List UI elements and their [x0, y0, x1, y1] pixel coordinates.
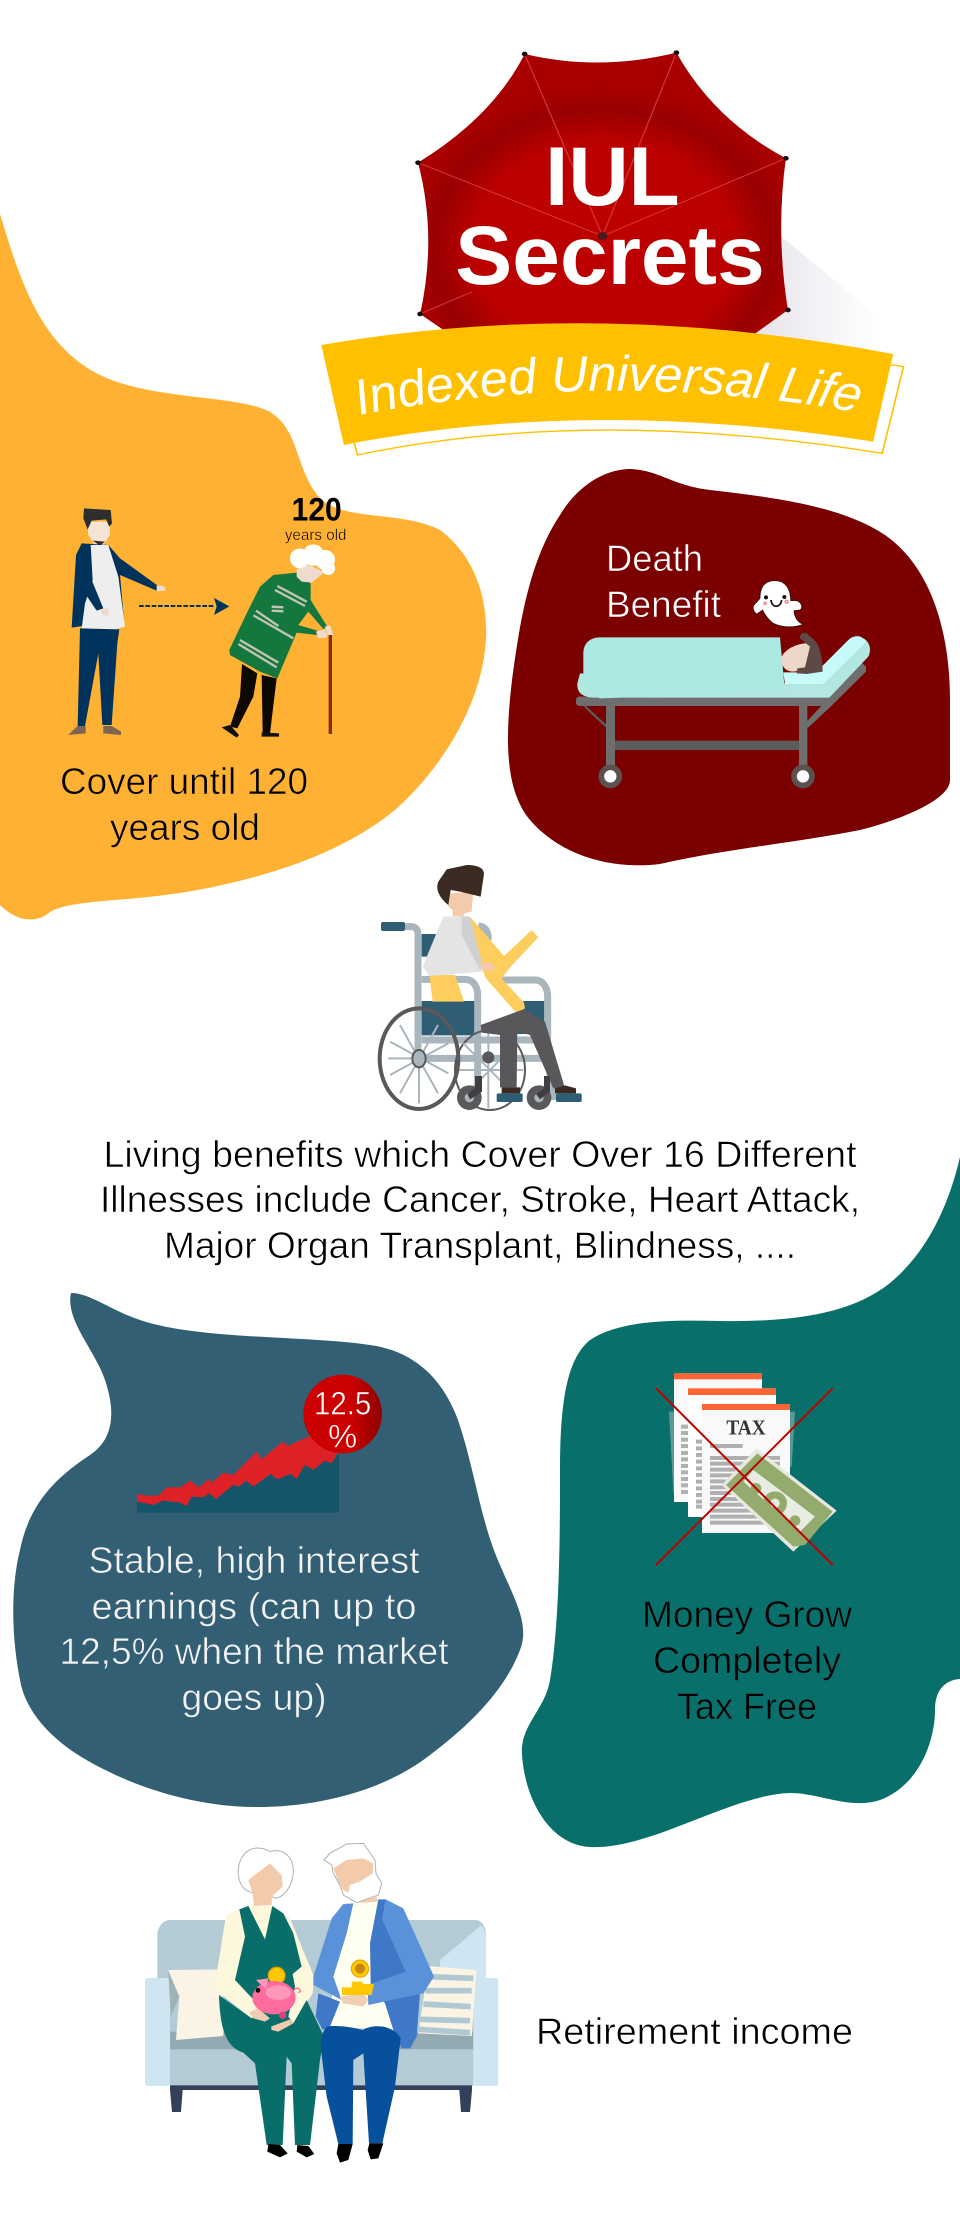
rate badge: 12.5: [314, 1384, 371, 1421]
text: stable interest: 12,5% when the market: [60, 1631, 449, 1672]
money: [722, 1448, 837, 1552]
sofa: [145, 1920, 498, 2112]
patient head: [781, 633, 823, 674]
text: cover until 120: Cover until 120: [60, 761, 308, 802]
wheelchair back: [381, 922, 553, 1100]
cushions: [168, 1966, 477, 2040]
big wheel: [380, 1008, 458, 1109]
illustration: retired couple on sofa: [145, 1843, 498, 2163]
chart: interest growth: [137, 1375, 382, 1513]
paper 3: TAX: [726, 1418, 766, 1440]
mattress: [577, 638, 870, 698]
red area: [137, 1436, 339, 1506]
paper 2: [688, 1388, 776, 1517]
back wheel: [455, 1030, 525, 1110]
illustration: person in wheelchair: [380, 865, 582, 1110]
piggy bank: [252, 1967, 300, 2019]
text: death benefit: Benefit: [606, 584, 722, 625]
panel: maroon blob: [508, 469, 950, 865]
rate badge: [303, 1375, 382, 1454]
panel: blue blob: [13, 1293, 523, 1807]
stretcher frame: [576, 663, 866, 768]
illustration: man pointing to old woman: [68, 492, 346, 738]
text: money grow: Completely: [653, 1640, 842, 1681]
paper 1: [674, 1373, 762, 1502]
umbrella shadow: [751, 235, 878, 367]
subtitle: Indexed Universal Life: [358, 354, 860, 415]
paper 3: [702, 1404, 790, 1533]
panel: teal blob: [522, 1157, 960, 1847]
umbrella canopy: [418, 53, 788, 335]
banner outline: [353, 365, 904, 455]
old woman: [222, 544, 335, 738]
illustration: tax papers crossed out: [656, 1373, 837, 1565]
text: stable interest: Stable, high interest: [88, 1540, 420, 1581]
dark area: [137, 1453, 339, 1513]
umbrella ribs: [418, 53, 786, 314]
text: money grow: Tax Free: [677, 1686, 817, 1727]
rate badge: %: [328, 1417, 357, 1454]
age sublabel: years old: [285, 527, 346, 544]
woman: [214, 1848, 324, 2157]
banner text path: [359, 391, 864, 415]
illustration: stretcher with ghost: [576, 581, 870, 785]
banner: [321, 323, 893, 445]
text: stable interest: earnings (can up to: [92, 1586, 416, 1627]
text: living benefits: Living benefits which Cover Over 16 Different: [104, 1134, 857, 1175]
man: [68, 508, 166, 735]
text: death benefit: Death: [606, 538, 703, 579]
text: living benefits: [100, 1134, 860, 1266]
umbrella tips: [415, 50, 791, 316]
text: stable interest: [60, 1540, 449, 1718]
red cross: [656, 1388, 833, 1565]
text: money grow: [642, 1594, 852, 1727]
text: death benefit: [606, 538, 722, 625]
heading: IUL: IUL: [545, 129, 680, 223]
body: [423, 865, 582, 1102]
ghost: [753, 581, 803, 627]
text: money grow: Money Grow: [642, 1594, 852, 1635]
text: living benefits: Illnesses include Cancer, Stroke, Heart Attack,: [100, 1179, 860, 1220]
panel: orange blob: [0, 214, 486, 919]
paper shadow: [669, 1412, 795, 1493]
text: cover until 120: years old: [110, 807, 260, 848]
text: stable interest: goes up): [182, 1677, 326, 1718]
man: [313, 1843, 434, 2163]
blanket: [583, 637, 785, 698]
small wheels: [457, 1076, 551, 1110]
stretcher wheels: [601, 767, 812, 785]
text: cover until 120: [60, 761, 308, 848]
heading: Secrets: Secrets: [455, 208, 765, 302]
dashed arrow: [139, 598, 229, 615]
age label: 120: [292, 492, 342, 528]
text: living benefits: Major Organ Transplant, Blindness, ....: [164, 1225, 796, 1266]
title: umbrella badge: [321, 50, 904, 456]
text: retirement income: Retirement income: [536, 2011, 853, 2052]
